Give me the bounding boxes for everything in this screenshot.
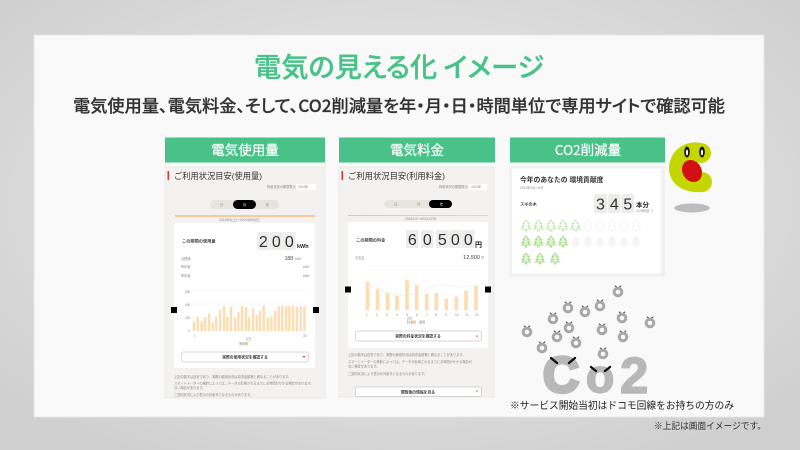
charge screen: ご利用状況目安(利用料金): [348, 171, 445, 181]
usage screen: この期間の使用量: [182, 238, 216, 244]
charge header: 電気料金: [390, 139, 444, 159]
usage breakdown: kWh: [303, 265, 310, 269]
charge combo chart: 7: [426, 313, 428, 317]
charge footnotes: ない場合があります。: [348, 364, 380, 368]
usage bar chart: 400: [185, 303, 191, 307]
CO2 counter 345: 5: [623, 196, 632, 213]
panel: electricity charge: [339, 138, 495, 397]
usage bar chart: 30: [303, 334, 307, 338]
subtitle: 電気使用量、電気料金、そして、CO2削減量を年・月・日・時間単位で専用サイトで確認可能: [73, 92, 725, 117]
usage breakdown: 昨年度: [181, 273, 191, 278]
charge counter 60,500 yen: 円: [475, 241, 482, 249]
charge screen: この期間の料金: [356, 236, 386, 244]
usage button: [182, 352, 308, 362]
charge breakdown: お支払: [355, 255, 365, 260]
CO2 card: 2021年1月〜6月: [520, 185, 543, 190]
charge header: [339, 138, 495, 162]
charge combo chart: (月): [407, 316, 412, 320]
usage bar chart: 0: [188, 329, 190, 333]
usage bar chart: 200: [185, 316, 191, 320]
usage screen: 利用状況の期間表示: [267, 184, 296, 189]
usage footnotes: ご契約状況により表示の対象外となるものがあります。: [174, 392, 253, 397]
icon: small CO2 characters: [523, 286, 654, 358]
panel: CO2 reduction: [509, 138, 665, 277]
usage breakdown: 目標値: [181, 256, 191, 261]
usage counter 200 kWh: [257, 232, 309, 251]
CO2 header: CO2削減量: [555, 139, 621, 159]
usage header: 電気使用量: [211, 139, 279, 159]
usage screen: 2024年: [298, 184, 309, 189]
charge second button: [356, 387, 482, 396]
panel: main white sheet: [34, 35, 764, 417]
CO2 header: [510, 138, 665, 162]
note: service availability: ※サービス開始当初はドコモ回線をお持ちの方のみ: [510, 399, 734, 412]
charge counter 60,500 yen: 6: [408, 232, 417, 249]
CO2 counter 345: 4: [610, 196, 619, 213]
usage footnotes: 上記の数字は目安であり、実際の使用状況は請求金額等と異なることがあります。: [174, 374, 291, 379]
usage breakdown: 昨年度: [181, 264, 191, 269]
usage footnotes: ない場合があります。: [174, 385, 206, 390]
CO2 card: スギの木: [520, 200, 538, 208]
charge combo chart: 9: [445, 313, 447, 317]
CO2 card: [509, 166, 665, 277]
usage bar chart: (日): [246, 337, 251, 341]
icon: green C character: [674, 146, 710, 212]
usage bar chart: 1: [194, 334, 196, 338]
charge counter 60,500 yen: 5: [438, 232, 447, 249]
charge screen: 2024年: [471, 184, 482, 189]
CO2 counter 345: [594, 194, 654, 213]
charge combo chart: 6: [416, 313, 418, 317]
icon: large grey CO2: [543, 347, 648, 404]
charge screen: 2024/1/1〜2024/12/31: [405, 217, 437, 221]
charge screen: [339, 167, 494, 397]
charge breakdown: [355, 255, 484, 261]
icon: large grey CO2: 2: [620, 347, 648, 404]
charge combo chart: 1: [366, 313, 368, 317]
usage footnotes: スマートメーターの検針によっては、データが反映されるまでにお時間がかかる場合があります。: [174, 380, 314, 386]
charge footnotes: 上記の数字は目安であり、実際の使用状況は請求金額等と異なることがあります。: [348, 352, 465, 357]
usage breakdown: [181, 256, 310, 278]
usage counter 200 kWh: 0: [285, 234, 294, 251]
usage screen: 日: [220, 203, 223, 207]
charge combo chart: 10: [455, 313, 459, 317]
usage bar chart: 電気: [239, 341, 246, 346]
CO2 card: 今年のあなたの 環境貢献度: [520, 175, 604, 184]
charge second button: 閲覧後の情報を見る: [401, 390, 435, 394]
tree rows: [521, 220, 641, 264]
charge footnotes: [348, 352, 473, 376]
icon: large grey CO2: C: [543, 347, 579, 403]
charge breakdown: 12,500: [463, 255, 480, 261]
CO2 counter 345: 本分: [636, 200, 650, 209]
usage bar chart: [185, 290, 307, 346]
charge combo chart: 12: [475, 313, 479, 317]
title: 電気の見える化 イメージ: [254, 46, 544, 85]
charge combo chart: 5: [406, 313, 408, 317]
charge counter 60,500 yen: 0: [464, 232, 473, 249]
CO2 counter 345: CO2削減 ⓘ: [636, 208, 654, 213]
usage counter 200 kWh: 0: [272, 234, 281, 251]
note: image disclaimer: ※上記は画面イメージです。: [654, 421, 766, 431]
usage screen: 月: [243, 203, 246, 207]
charge footnotes: ご契約状況により表示の対象外となるものがあります。: [348, 371, 427, 376]
charge screen: 日: [394, 202, 397, 206]
panel: electricity usage: [165, 138, 325, 398]
charge screen: 年: [440, 202, 444, 206]
usage screen: [165, 167, 325, 398]
charge combo chart: 11: [465, 313, 469, 317]
usage bar chart: 600: [185, 290, 191, 294]
charge button: 実際の料金状況を確認する: [395, 334, 441, 338]
charge screen: 月: [417, 202, 420, 206]
usage screen: 年: [266, 202, 270, 207]
charge combo chart: 料金: [407, 320, 414, 324]
charge breakdown: 円: [481, 256, 484, 260]
usage screen: 2024/6/1(土)〜2024/6/30(日): [219, 217, 259, 222]
charge combo chart: 3: [386, 313, 388, 317]
charge combo chart: 4: [396, 313, 398, 317]
charge chart arrows: [345, 286, 491, 292]
usage counter 200 kWh: kWh: [297, 244, 309, 250]
usage breakdown: 188: [285, 256, 293, 262]
usage breakdown: kWh: [303, 274, 310, 278]
usage header: [165, 138, 325, 162]
charge combo chart: 2: [376, 313, 378, 317]
usage screen: ご利用状況目安(使用量): [174, 171, 262, 181]
charge screen: 利用状況の期間表示: [439, 184, 468, 189]
usage chart arrows: [171, 307, 319, 313]
CO2 counter 345: 3: [596, 196, 605, 213]
charge combo chart: [364, 270, 480, 324]
charge counter 60,500 yen: 0: [451, 232, 460, 249]
usage button: 実際の使用状況を確認する: [222, 354, 268, 360]
charge counter 60,500 yen: [406, 230, 482, 249]
charge button: [356, 331, 482, 341]
charge footnotes: スマートメーターの検針によっては、データが反映されるまでにお時間がかかる場合が: [348, 359, 473, 364]
usage footnotes: [174, 374, 314, 397]
icon: large grey CO2: o: [586, 350, 614, 402]
charge combo chart: 使用: [419, 320, 425, 324]
usage breakdown: kWh: [295, 257, 302, 261]
usage counter 200 kWh: 2: [259, 234, 268, 251]
charge counter 60,500 yen: 0: [423, 232, 432, 249]
charge combo chart: 8: [435, 313, 437, 317]
